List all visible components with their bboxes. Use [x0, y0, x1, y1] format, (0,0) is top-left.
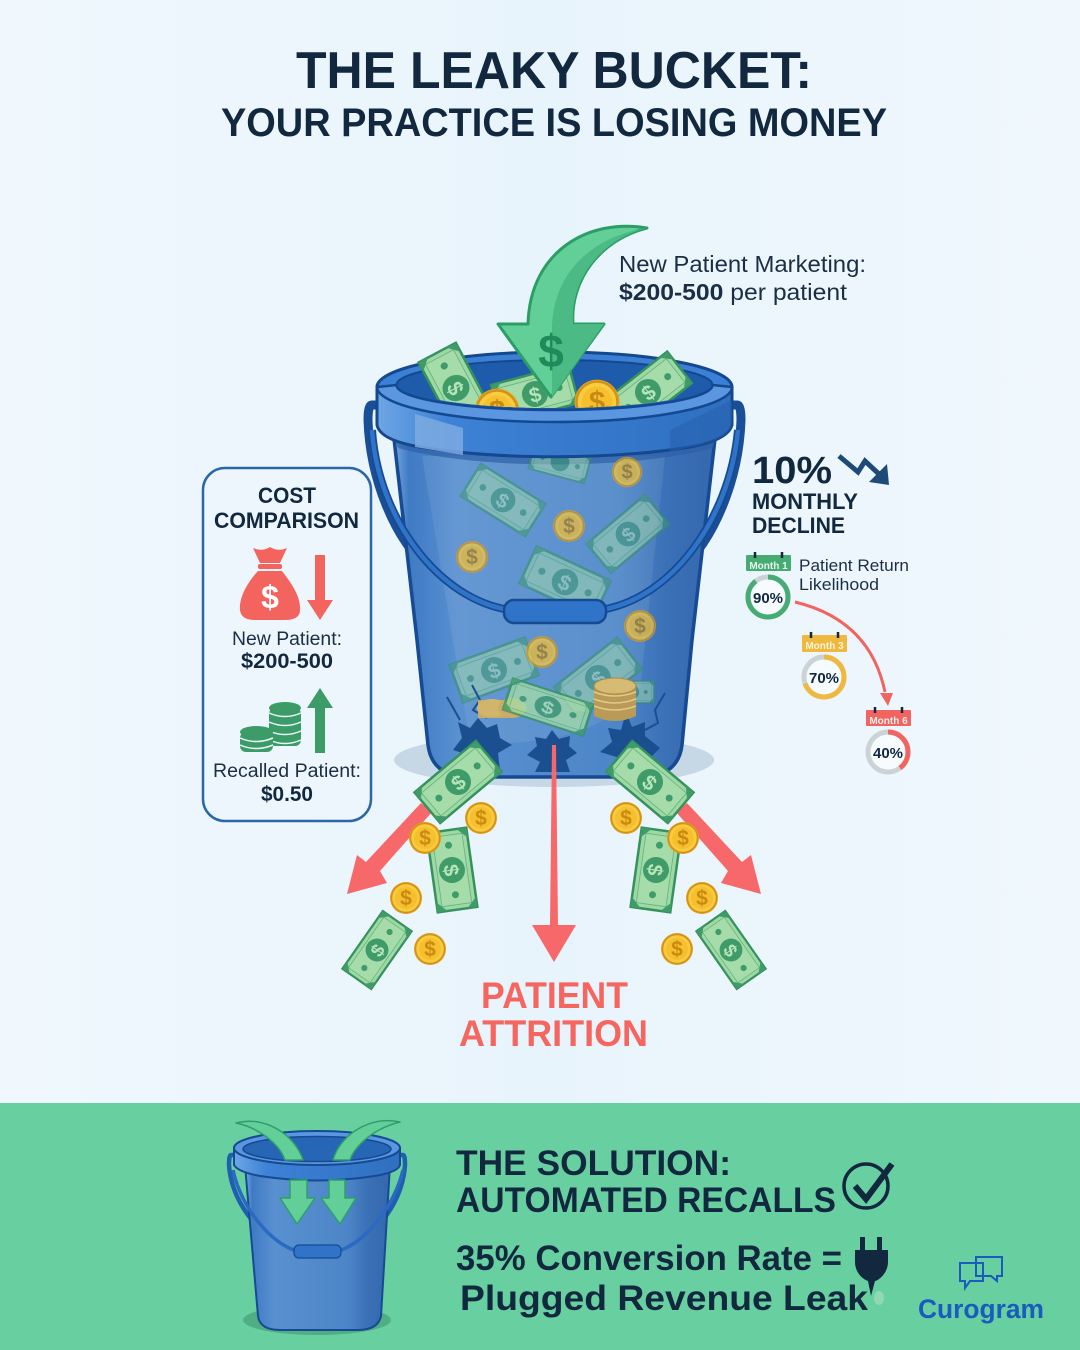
money in bucket top: $ — [441, 378, 469, 400]
bottom coins and bill — [477, 678, 636, 736]
icon: decline arrow — [839, 456, 889, 485]
falling bills and coins: $ — [637, 771, 661, 796]
small bucket handle ears — [229, 1155, 275, 1240]
bucket handle ears — [368, 405, 430, 570]
10% monthly decline — [752, 450, 889, 538]
bucket shadow — [394, 733, 714, 787]
curogram logo — [918, 1257, 1044, 1324]
falling bills and coins: $ — [447, 770, 471, 796]
month 6 gauge: 40% — [873, 745, 903, 762]
recalled patient cost: $0.50 — [261, 783, 313, 806]
submerged coins: $ — [466, 546, 478, 569]
handle clasp — [504, 600, 606, 623]
month 3 gauge — [802, 632, 847, 697]
rim shade under band — [394, 436, 716, 464]
submerged coins: $ — [634, 615, 646, 638]
patient return likelihood label — [799, 556, 909, 594]
patient attrition label — [459, 975, 648, 1054]
month 6 gauge — [866, 707, 911, 772]
conversion rate text: 35% Conversion Rate = — [456, 1239, 842, 1278]
falling bills and coins: $ — [642, 862, 667, 877]
10% monthly decline: MONTHLY — [752, 489, 858, 514]
falling bills and coins: $ — [677, 827, 689, 850]
falling bills and coins: $ — [671, 938, 683, 961]
new patient cost: $200-500 — [241, 650, 333, 673]
falling bills and coins — [342, 741, 766, 989]
curved trend arrow — [795, 602, 893, 706]
icon: green up arrow — [307, 688, 333, 753]
money in bucket top — [417, 341, 694, 408]
falling bills and coins: $ — [438, 863, 463, 878]
month 1 gauge — [746, 552, 791, 617]
body highlight — [422, 456, 665, 743]
new patient marketing label — [619, 251, 866, 305]
icon: red down arrow — [307, 555, 333, 620]
cracks — [447, 685, 665, 772]
money in bucket top: $ — [637, 380, 661, 406]
panel heading: COMPARISON — [214, 508, 359, 533]
bottom coins and bill: $ — [539, 697, 556, 719]
new patient marketing label: New Patient Marketing: — [619, 251, 866, 277]
month 1 gauge: Month 1 — [749, 561, 788, 572]
recalled patient cost: Recalled Patient: — [213, 761, 361, 782]
falling bills and coins: $ — [475, 807, 487, 830]
recalled patient cost — [213, 761, 361, 806]
falling bills and coins: $ — [400, 887, 412, 910]
icon: coin stacks — [240, 702, 301, 752]
money in bucket top: $ — [589, 386, 605, 419]
bucket handle — [372, 430, 738, 610]
green inflow arrow — [498, 226, 647, 397]
month 3 gauge: Month 3 — [805, 641, 844, 652]
solution heading — [456, 1144, 836, 1220]
patient return likelihood label: Likelihood — [799, 575, 879, 594]
submerged bills: $ — [485, 658, 504, 684]
falling bills and coins: $ — [620, 807, 632, 830]
small plugged bucket — [229, 1121, 405, 1335]
red leak arrows — [347, 745, 761, 962]
cost comparison panel — [203, 468, 371, 821]
solution band — [0, 1103, 1080, 1350]
submerged bills: $ — [492, 489, 513, 514]
small bucket body — [245, 1165, 390, 1330]
falling bills and coins: $ — [424, 938, 436, 961]
panel heading — [214, 483, 359, 533]
solution heading: THE SOLUTION: — [456, 1144, 731, 1183]
new patient marketing label: $200-500 per patient — [619, 279, 848, 305]
conversion rate text: Plugged Revenue Leak — [460, 1279, 869, 1318]
falling bills and coins: $ — [419, 827, 431, 850]
submerged coins: $ — [563, 515, 575, 538]
small bucket rim — [234, 1148, 400, 1180]
rim front — [377, 385, 732, 422]
month 3 gauge: 70% — [809, 670, 839, 687]
icon: check mark — [844, 1164, 892, 1208]
icon: money bag: $ — [261, 579, 279, 615]
falling bills and coins: $ — [696, 887, 708, 910]
icon: money bag — [240, 547, 300, 620]
month 6 gauge: Month 6 — [869, 716, 908, 727]
patient attrition label: PATIENT — [481, 975, 628, 1016]
money in bucket top: $ — [527, 383, 544, 408]
green inflow arrow: $ — [538, 325, 564, 377]
submerged bills: $ — [587, 666, 611, 692]
small bucket handle — [233, 1170, 403, 1252]
submerged bills — [450, 441, 669, 718]
10% monthly decline: 10% — [752, 450, 832, 492]
title: YOUR PRACTICE IS LOSING MONEY — [221, 101, 887, 145]
submerged coins — [456, 457, 656, 668]
bucket body — [393, 430, 716, 777]
title — [221, 42, 887, 145]
falling bills and coins: $ — [719, 940, 743, 961]
icon: plug — [855, 1237, 888, 1305]
falling bills and coins: $ — [366, 939, 389, 961]
new patient cost — [232, 629, 342, 673]
10% monthly decline: DECLINE — [752, 513, 845, 538]
submerged bills: $ — [618, 523, 640, 547]
submerged coins: $ — [621, 462, 633, 484]
title: THE LEAKY BUCKET: — [296, 42, 812, 100]
patient attrition label: ATTRITION — [459, 1013, 648, 1054]
submerged bills: $ — [554, 570, 575, 596]
conversion rate text — [456, 1239, 869, 1318]
rim back and inner — [377, 352, 732, 422]
logo icon — [960, 1257, 1002, 1288]
money in bucket top: $ — [489, 395, 505, 428]
solution heading: AUTOMATED RECALLS — [456, 1181, 836, 1220]
small bucket arrows — [236, 1121, 400, 1224]
submerged coins: $ — [536, 641, 548, 664]
patient return likelihood label: Patient Return — [799, 556, 909, 575]
curogram logo: Curogram — [918, 1294, 1044, 1324]
month 1 gauge: 90% — [753, 590, 783, 607]
new patient cost: New Patient: — [232, 629, 342, 650]
panel heading: COST — [258, 483, 317, 508]
main leaky bucket — [368, 343, 741, 777]
